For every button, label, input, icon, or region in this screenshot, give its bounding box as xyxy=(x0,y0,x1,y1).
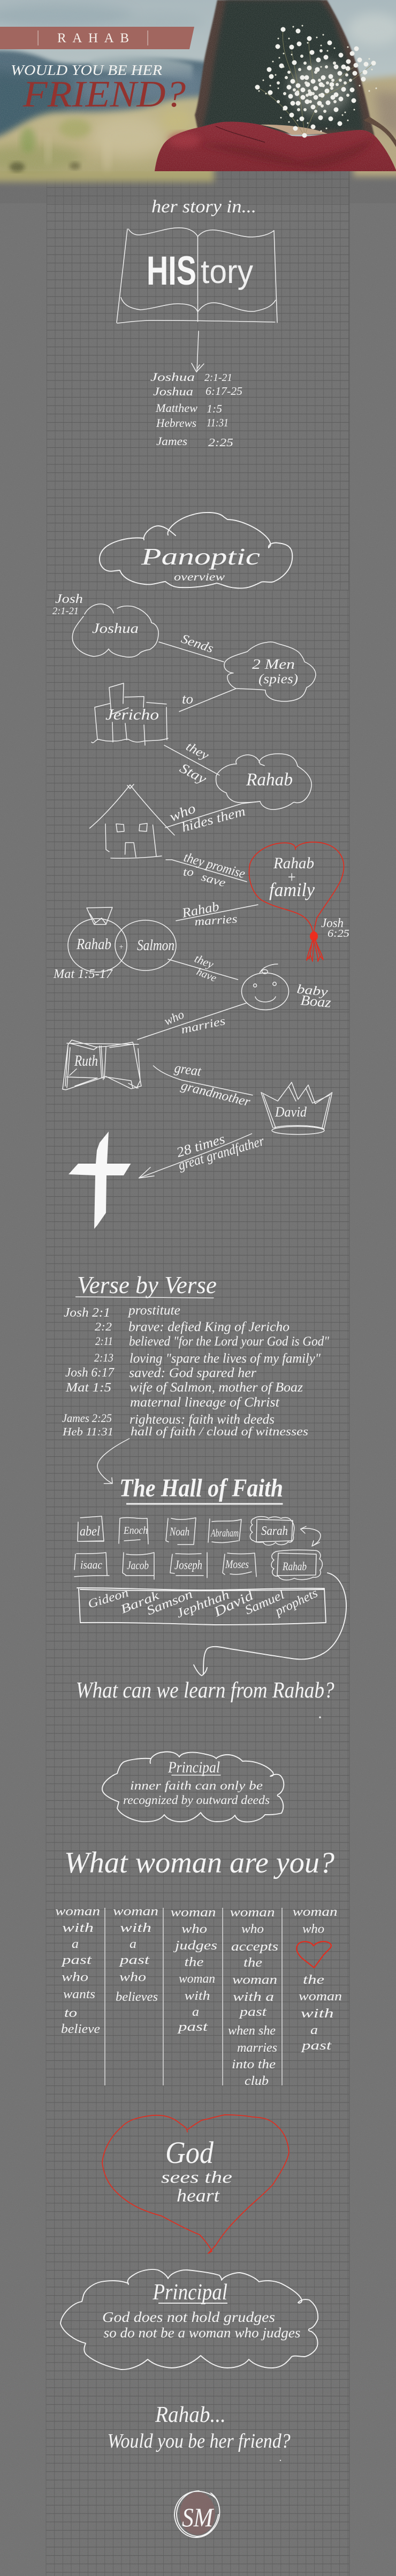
big red heart: God sees the heart: heart xyxy=(177,2186,220,2206)
connector: they promise to save: they promise xyxy=(182,850,247,881)
column 2: woman with a past who believes: believes xyxy=(116,1990,158,2004)
connector: great grandmother: grandmother xyxy=(180,1079,252,1110)
icon: book of Ruth: Ruth xyxy=(74,1053,98,1069)
connector: they promise to save: to xyxy=(183,865,194,878)
column 4: woman who accepts the woman with a past when she marries into the club: who xyxy=(241,1922,264,1936)
icon: white cross xyxy=(68,1132,131,1229)
column 2: woman with a past who believes: past xyxy=(118,1953,150,1967)
icon: red heart xyxy=(296,1941,331,1968)
connector: Rahab marries: marries xyxy=(194,912,238,928)
arrow: Rahab to What can we learn xyxy=(194,1573,346,1676)
connector: they have: they xyxy=(193,951,216,971)
cloud: Principal inner faith: inner faith can only be xyxy=(130,1779,263,1792)
column 5: woman who loves the woman with a past: woman xyxy=(299,1990,342,2004)
hero photo banner xyxy=(0,0,396,182)
box: Isaac xyxy=(74,1553,109,1577)
reference: Josh 6:25: 6:25 xyxy=(328,928,349,939)
column 1: woman with a past who wants to believe: who xyxy=(62,1970,88,1984)
cloud: Rahab: Rahab xyxy=(246,770,293,790)
cloud: 2 Men (spies): 2 Men xyxy=(252,656,295,672)
arrow: to Hall of Faith xyxy=(97,1439,130,1484)
tory in thin: tory xyxy=(201,254,253,291)
box: other heroes of faith: Barak xyxy=(119,1588,161,1616)
column dividers xyxy=(105,1908,282,2085)
icon: crown of David: David xyxy=(275,1104,307,1120)
column 1: woman with a past who wants to believe xyxy=(55,1905,100,2036)
icon: open book with HIStory xyxy=(117,228,277,323)
box: other heroes of faith: Gideon xyxy=(86,1586,130,1611)
box: Abraham xyxy=(208,1519,241,1542)
list: verse by verse table: believed "for the Lord your God is God" xyxy=(129,1334,329,1349)
column 4: woman who accepts the woman with a past when she marries into the club: marries xyxy=(237,2041,277,2055)
list: verse by verse table: Mat 1:5 xyxy=(65,1381,111,1395)
list: verse by verse table: loving "spare the lives of my family" xyxy=(130,1351,321,1366)
column 5: woman who loves the woman with a past: with xyxy=(301,2007,334,2021)
reference: Mat 1:5-17: Mat 1:5-17 xyxy=(53,967,113,981)
scripture list: 6:17-25 xyxy=(205,385,242,398)
title: would you be her: WOULD YOU BE HER xyxy=(11,62,163,78)
box: Moses: Moses xyxy=(225,1557,249,1571)
cloud: 2 Men (spies) xyxy=(224,642,316,701)
column 3: woman who judges the woman with a past xyxy=(170,1906,217,2034)
column 4: woman who accepts the woman with a past when she marries into the club: accepts xyxy=(231,1940,278,1954)
connector: they stay with Rahab: Stay xyxy=(177,760,209,787)
connector: who marries Ruth: who xyxy=(162,1007,186,1028)
list: verse by verse table: Josh 2:1 xyxy=(64,1306,110,1320)
icon: city of Jericho: Jericho xyxy=(105,706,159,723)
column 2: woman with a past who believes: a xyxy=(130,1937,136,1951)
logo: SM in hand-drawn circle xyxy=(174,2491,219,2537)
photo grain xyxy=(0,0,396,171)
column 2: woman with a past who believes xyxy=(113,1905,158,2004)
connector: they have: have xyxy=(195,966,218,984)
box: Abraham: Abraham xyxy=(210,1527,239,1539)
big red heart: God sees the heart: God xyxy=(165,2135,214,2170)
arrow: book to verses xyxy=(192,331,204,372)
icon: wedding rings Rahab + Salmon: Rahab xyxy=(76,936,111,953)
reference: Josh 6:25 xyxy=(321,916,349,939)
box: Rahab highlighted: Rahab xyxy=(282,1560,307,1573)
icon: wedding rings Rahab + Salmon: + xyxy=(119,943,124,952)
list: verse by verse table: 2:2 xyxy=(95,1320,112,1333)
column 1: woman with a past who wants to believe: believe xyxy=(61,2022,100,2036)
column 4: woman who accepts the woman with a past when she marries into the club: the xyxy=(243,1956,262,1970)
hall of faith boxes: row 1 xyxy=(78,1516,321,1546)
column 5: woman who loves the woman with a past: a xyxy=(310,2023,318,2037)
cloud: Principal inner faith: recognized by outward deeds xyxy=(123,1793,270,1807)
cloud: 2 Men (spies): (spies) xyxy=(258,672,298,686)
logo: SM in hand-drawn circle: SM xyxy=(182,2502,214,2532)
photo: woman's long dark hair xyxy=(195,0,396,147)
cloud: Panoptic overview: Panoptic xyxy=(141,544,261,570)
heading: Verse by Verse: Verse by Verse xyxy=(77,1271,217,1298)
icon: wedding rings Rahab + Salmon xyxy=(68,907,176,972)
photo: baby's breath flowers in hair xyxy=(257,26,376,136)
box: Joseph: Joseph xyxy=(174,1558,202,1572)
list: verse by verse table: hall of faith / cloud of witnesses xyxy=(131,1425,308,1438)
column 3: woman who judges the woman with a past: with xyxy=(184,1989,210,2003)
box: Rahab highlighted xyxy=(271,1550,322,1580)
scripture list: 11:31 xyxy=(207,416,229,429)
box: Abel: abel xyxy=(80,1524,100,1539)
connector: they stay with Rahab xyxy=(164,739,219,787)
column 3: woman who judges the woman with a past: who xyxy=(181,1922,207,1936)
box: Noah: Noah xyxy=(169,1525,189,1538)
reference: Josh 2:1-21 xyxy=(52,592,83,617)
box: other heroes of faith: Samson xyxy=(145,1587,195,1618)
photo: sky and hills xyxy=(0,0,396,171)
arrow: David to cross: great grandfather xyxy=(176,1133,266,1173)
box: other heroes of faith: David xyxy=(211,1587,256,1620)
list: verse by verse table: maternal lineage of Christ xyxy=(130,1395,280,1410)
list: verse by verse table: Heb 11:31 xyxy=(62,1425,113,1438)
scripture list: 2:25 xyxy=(208,436,233,449)
column 4: woman who accepts the woman with a past when she marries into the club: when she xyxy=(228,2024,276,2038)
box: Sarah highlighted xyxy=(250,1517,294,1545)
cloud: Joshua xyxy=(72,604,158,657)
scripture list: 1:5 xyxy=(207,402,222,415)
column 4: woman who accepts the woman with a past when she marries into the club xyxy=(228,1906,278,2088)
list: verse by verse table xyxy=(62,1303,329,1438)
big red heart: God sees the heart: sees the xyxy=(161,2167,232,2187)
scripture list: Joshua xyxy=(153,385,193,398)
connector: great grandmother: great xyxy=(173,1060,202,1079)
connector: Joshua sends 2 men: Sends xyxy=(179,632,215,656)
arrow: David to cross: 28 times xyxy=(174,1131,227,1160)
box: other heroes of faith: Samuel xyxy=(243,1588,287,1617)
box: Enoch: Enoch xyxy=(123,1525,148,1537)
arrow: Sarah to Rahab xyxy=(301,1526,321,1546)
list: verse by verse table: 2:13 xyxy=(94,1351,113,1364)
heading: What woman are you?: What woman are you? xyxy=(64,1846,334,1879)
box: other heroes of faith: Jephthah xyxy=(174,1588,231,1621)
column 5: woman who loves the woman with a past: woman xyxy=(292,1905,337,1919)
box: other heroes of faith xyxy=(77,1586,326,1625)
icon: baby Boaz face xyxy=(242,964,332,1011)
scripture list: 2:1-21 xyxy=(204,372,232,384)
box: Isaac: isaac xyxy=(80,1558,102,1571)
cloud: Rahab xyxy=(216,754,311,809)
column 2: woman with a past who believes: with xyxy=(120,1921,151,1935)
ribbon with name Rahab xyxy=(0,27,194,49)
column 2: woman with a past who believes: woman xyxy=(113,1905,158,1918)
cloud: Principal God does not hold grudges: God does not hold grudges xyxy=(102,2309,275,2325)
box: other heroes of faith: prophets xyxy=(272,1586,320,1619)
scarlet cord tassel xyxy=(307,931,323,961)
connector: they promise to save: save xyxy=(200,870,227,890)
reference: Josh 2:1-21: Josh xyxy=(55,592,83,606)
connector: to Jericho xyxy=(179,689,236,712)
box: Moses xyxy=(223,1553,256,1577)
big red heart: God sees the heart xyxy=(102,2115,289,2253)
column 4: woman who accepts the woman with a past when she marries into the club: into the xyxy=(232,2058,276,2071)
box: Sarah highlighted: Sarah xyxy=(261,1524,288,1538)
title: friend: FRIEND? xyxy=(22,74,186,115)
column 5: woman who loves the woman with a past xyxy=(292,1905,342,2053)
HIS in bold: HIS xyxy=(147,248,196,294)
icon: baby Boaz face: Boaz xyxy=(300,992,332,1011)
cloud: Principal God does not hold grudges: so do not be a woman who judges xyxy=(104,2325,301,2341)
closing text: Would you be her friend?: Would you be her friend? xyxy=(108,2430,291,2452)
arrow: David to cross xyxy=(139,1131,266,1178)
column 1: woman with a past who wants to believe: a xyxy=(72,1937,79,1951)
icon: baby Boaz face: baby xyxy=(296,982,329,999)
red heart: Rahab + family with scarlet cord: family xyxy=(269,879,315,900)
photo: red jacket on shoulders xyxy=(155,121,396,171)
connector: they promise to save xyxy=(166,850,247,890)
heading: her story in: her story in... xyxy=(151,197,256,217)
connector: who hides them: hides them xyxy=(180,804,247,835)
column 1: woman with a past who wants to believe: with xyxy=(62,1921,94,1935)
connector: great grandmother xyxy=(153,1060,253,1110)
closing text: Rahab...: Rahab... xyxy=(155,2403,226,2427)
box: Enoch xyxy=(119,1518,148,1544)
scripture list xyxy=(150,370,242,449)
connector: who marries Ruth xyxy=(138,1003,246,1039)
column 5: woman who loves the woman with a past: who xyxy=(302,1922,324,1936)
photo: neck xyxy=(260,125,328,135)
column 4: woman who accepts the woman with a past when she marries into the club: with a xyxy=(233,1990,274,2004)
reference: Josh 6:25: Josh xyxy=(321,916,344,930)
column 3: woman who judges the woman with a past: judges xyxy=(173,1939,217,1953)
connector: who marries Ruth: marries xyxy=(180,1014,226,1036)
heading: The Hall of Faith: The Hall of Faith xyxy=(119,1474,283,1502)
photo: golden grass field xyxy=(0,75,396,182)
cloud: Panoptic overview xyxy=(100,513,292,588)
column 4: woman who accepts the woman with a past when she marries into the club: woman xyxy=(232,1973,277,1987)
column 4: woman who accepts the woman with a past when she marries into the club: club xyxy=(245,2074,269,2088)
column 4: woman who accepts the woman with a past when she marries into the club: woman xyxy=(230,1906,275,1920)
box: Noah xyxy=(166,1518,196,1545)
column 3: woman who judges the woman with a past: past xyxy=(177,2020,209,2034)
column 1: woman with a past who wants to believe: past xyxy=(60,1953,93,1967)
scripture list: Matthew xyxy=(155,401,197,415)
column 1: woman with a past who wants to believe: to xyxy=(64,2006,77,2020)
scripture list: Joshua xyxy=(150,370,195,384)
cloud: Principal God does not hold grudges: Principal xyxy=(153,2280,227,2305)
column 4: woman who accepts the woman with a past when she marries into the club: past xyxy=(239,2005,268,2019)
icon: wedding rings Rahab + Salmon: Salmon xyxy=(137,937,174,954)
list: verse by verse table: saved: God spared her xyxy=(129,1366,256,1380)
box: Jacob: Jacob xyxy=(127,1558,149,1572)
red heart: Rahab + family with scarlet cord: + xyxy=(287,868,296,886)
red heart: Rahab + family with scarlet cord xyxy=(249,842,344,961)
connector: who hides them: who xyxy=(167,800,198,825)
column 3: woman who judges the woman with a past: woman xyxy=(170,1906,216,1920)
heading: What can we learn from Rahab?: What can we learn from Rahab? xyxy=(76,1678,334,1703)
icon: Rahab's house xyxy=(90,784,174,858)
heading: What can we learn from Rahab? xyxy=(76,1678,334,1718)
list: verse by verse table: 2:11 xyxy=(95,1334,113,1348)
connector: Rahab marries: Rahab xyxy=(180,899,220,921)
red heart: Rahab + family with scarlet cord: Rahab xyxy=(273,854,314,872)
box: Jacob xyxy=(123,1553,154,1579)
column 1: woman with a past who wants to believe: wants xyxy=(63,1988,95,2001)
cloud: Principal inner faith xyxy=(102,1752,284,1822)
list: verse by verse table: wife of Salmon, mother of Boaz xyxy=(130,1380,303,1395)
scripture list: James xyxy=(156,434,187,448)
list: verse by verse table: Josh 6:17 xyxy=(65,1366,115,1380)
list: verse by verse table: prostitute xyxy=(127,1303,180,1318)
icon: book of Ruth xyxy=(63,1040,141,1090)
scripture list: Hebrews xyxy=(156,416,196,430)
column 1: woman with a past who wants to believe: woman xyxy=(55,1905,100,1918)
cloud: Principal inner faith: Principal xyxy=(167,1759,220,1776)
column 3: woman who judges the woman with a past: the xyxy=(184,1955,204,1969)
reference: Josh 2:1-21: 2:1-21 xyxy=(52,606,79,617)
connector: Joshua sends 2 men xyxy=(159,632,224,662)
column 2: woman with a past who believes: who xyxy=(119,1970,146,1984)
connector: Rahab marries xyxy=(176,899,258,928)
connector: to Jericho: to xyxy=(182,691,193,707)
column 5: woman who loves the woman with a past: the xyxy=(303,1973,324,1987)
list: verse by verse table: James 2:25 xyxy=(62,1411,112,1425)
box: Abel xyxy=(78,1516,104,1541)
icon: crown of David xyxy=(261,1082,332,1134)
hall of faith boxes: row 2 xyxy=(74,1550,322,1580)
connector: who hides them xyxy=(165,800,260,835)
icon: city of Jericho xyxy=(92,683,168,745)
cloud: Joshua: Joshua xyxy=(92,621,139,636)
column 3: woman who judges the woman with a past: woman xyxy=(179,1972,215,1986)
cloud: Principal God does not hold grudges xyxy=(60,2269,318,2369)
connector: they stay with Rahab: they xyxy=(184,739,211,763)
column 5: woman who loves the woman with a past: past xyxy=(300,2039,332,2053)
cloud: Panoptic overview: overview xyxy=(174,571,225,583)
connector: they have xyxy=(168,951,238,984)
list: verse by verse table: brave: defied King of Jericho xyxy=(128,1320,290,1334)
list: verse by verse table: righteous: faith with deeds xyxy=(130,1412,275,1427)
box: Joseph xyxy=(170,1553,207,1578)
column 3: woman who judges the woman with a past: a xyxy=(192,2005,199,2019)
table: five columns of women xyxy=(55,1905,342,2088)
ribbon with name Rahab: RAHAB xyxy=(57,31,129,45)
